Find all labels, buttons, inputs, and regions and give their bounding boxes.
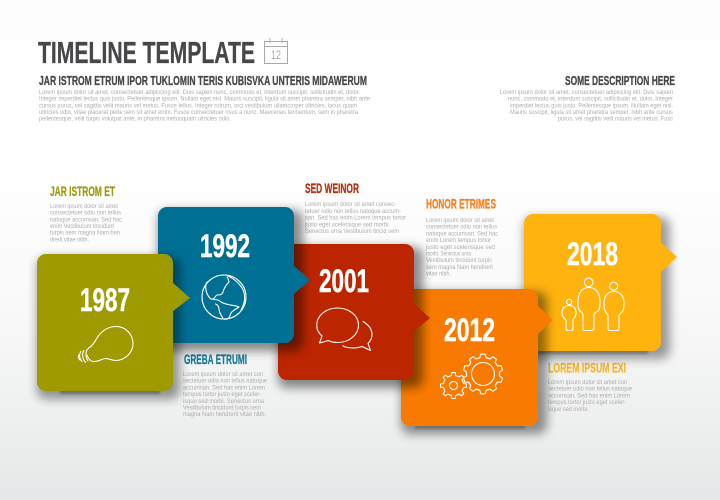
text block: Greba Etrumi bbox=[183, 352, 268, 418]
right paragraph: Mauris suscipit, ligula sit amet pharetra semper, nibh ante cursus bbox=[510, 110, 673, 116]
text block: Sed Weinor: san. Sed hac enim Lorem tempus tortor bbox=[305, 216, 406, 222]
text block: Greba Etrumi: accumsan. Sed hac enim Lorem bbox=[183, 385, 265, 391]
text block: Honor Etrimes: natoque accumsan. Sed hac bbox=[426, 231, 498, 237]
text block: Jar Istrom Et: JAR ISTROM ET bbox=[50, 184, 115, 199]
text block: Lorem Ipsum Exi: tempus tortor justo eget sceler- bbox=[548, 400, 626, 406]
icon: gears bbox=[440, 354, 504, 398]
text block: Jar Istrom Et bbox=[50, 184, 122, 243]
card: 2018 bbox=[524, 214, 677, 359]
text block: Honor Etrimes: sem magna Nam hendrerit bbox=[426, 265, 493, 271]
right paragraph: nunc, commodo et, interdum suscipit, sollicitudin et, dolor. Integer bbox=[508, 97, 673, 103]
text block: Honor Etrimes: Vestibulum tincidunt turpis bbox=[426, 258, 492, 264]
year 1987: 1987 bbox=[80, 282, 130, 318]
icon: globe bbox=[202, 275, 246, 319]
year 2012: 2012 bbox=[444, 312, 495, 348]
text block: Honor Etrimes: Lorem ipsum dolor sit amet bbox=[426, 218, 494, 224]
text block: Sed Weinor bbox=[304, 181, 406, 235]
text block: Honor Etrimes: consectetuer odio non tellus bbox=[426, 225, 497, 231]
year 2001: 2001 bbox=[319, 263, 369, 299]
text block: Jar Istrom Et: natoque accumsan. Sed hac bbox=[50, 217, 122, 223]
text block: Greba Etrumi: GREBA ETRUMI bbox=[184, 352, 247, 367]
right paragraph: purus, vel sagittis velit mauris vel metus. Fusc bbox=[558, 117, 673, 123]
text block: Honor Etrimes bbox=[425, 196, 498, 278]
text block: Honor Etrimes: HONOR ETRIMES bbox=[426, 196, 496, 212]
year 1992: 1992 bbox=[200, 228, 250, 264]
text block: Greba Etrumi: Vestibulum tincidunt turpis sem bbox=[183, 406, 261, 412]
text block: Honor Etrimes: morbi. Senectus urna bbox=[426, 252, 472, 258]
text block: Lorem Ipsum Exi bbox=[548, 360, 633, 413]
text block: Honor Etrimes: justo eget scelerisque sed bbox=[425, 245, 495, 251]
text block: Jar Istrom Et: enim Vestibulum tincidunt bbox=[50, 224, 114, 230]
intro paragraph: cursus purus, vel sagittis velit mauris vel metus. Fusce tellus. Integer rutrum, orci vestibulum ullamcorper ultricies, lacus quam bbox=[39, 103, 357, 109]
right paragraph: imperdiet lectus quis justo. Pellentesque ipsum. Nullam eget nisl. bbox=[510, 103, 673, 109]
text block: Jar Istrom Et: Lorem ipsum dolor sit amet bbox=[50, 204, 118, 210]
text block: Sed Weinor: Senectus urna Vestibulum tincid sem bbox=[305, 229, 399, 235]
text block: Jar Istrom Et: consectetuer odio non tellus bbox=[50, 211, 121, 217]
text block: Jar Istrom Et: turpis sem magna Nam hen bbox=[50, 231, 120, 237]
intro paragraph: pellentesque, velit turpis volutpat ante, in pharetra metusquam ultricies odio. bbox=[39, 117, 231, 123]
text block: Jar Istrom Et: drerit vitae nibh. bbox=[50, 237, 89, 243]
card: 2001 bbox=[278, 244, 430, 388]
subheading: JAR ISTROM ETRUM IPOR TUKLOMIN TERIS KUBISVKA UNTERIS MIDAWERUM bbox=[39, 73, 367, 88]
text block: Greba Etrumi: tempus tortor justo eget sceler- bbox=[183, 392, 261, 398]
text block: Greba Etrumi: sectetuer odio non tellus natoque bbox=[183, 379, 268, 385]
icon: calendar: 12 bbox=[271, 48, 281, 62]
text block: Greba Etrumi: magna Nam hendrerit vitae nibh. bbox=[183, 412, 266, 418]
year 2018: 2018 bbox=[567, 236, 618, 272]
title: TIMELINE TEMPLATE bbox=[38, 35, 255, 70]
card: 1987 bbox=[37, 254, 190, 399]
text block: Honor Etrimes: enim Lorem tempus tortor bbox=[426, 238, 491, 244]
text block: Lorem Ipsum Exi: sectetuer odio non tellus natoque bbox=[548, 387, 633, 393]
text block: Lorem Ipsum Exi: Lorem ipsum dolor sit amet con bbox=[548, 380, 627, 386]
text block: Lorem Ipsum Exi: accumsan. Sed hac enim Lorem bbox=[548, 393, 630, 399]
text block: Honor Etrimes: vitae nibh. bbox=[426, 272, 451, 278]
text block: Sed Weinor: tetuer odio non tellus natoque accum- bbox=[305, 209, 401, 215]
intro paragraph bbox=[39, 90, 371, 123]
text block: Lorem Ipsum Exi: isque sed morbi. bbox=[548, 407, 589, 413]
intro paragraph: Lorem ipsum dolor sit amet, consectetuer adipiscing elit. Duis sapien nunc, commodo et, interdum suscipit, sollicitudin et, dolor. bbox=[39, 90, 360, 96]
text block: Sed Weinor: Lorem ipsum dolor sit amet consec- bbox=[305, 202, 396, 208]
text block: Sed Weinor: justo eget scelerisque sed morbi. bbox=[304, 222, 390, 228]
right paragraph: Lorem ipsum dolor sit amet, consectetuer adipiscing elit. Duis sapien bbox=[500, 90, 673, 96]
icon: calendar bbox=[264, 38, 288, 64]
text block: Sed Weinor: SED WEINOR bbox=[305, 181, 359, 196]
intro paragraph: Integer imperdiet lectus quis justo. Pellentesque ipsum. Nullam eget nisl. Mauris suscipit, ligula sit amet pharetra semper, nibh ante bbox=[39, 97, 371, 103]
card: 2012 bbox=[401, 289, 553, 434]
icon: family bbox=[562, 278, 624, 330]
icon: light bulb bbox=[78, 326, 133, 362]
intro paragraph: ultricies odio, vitae placerat pede sem sit amet enim. Fusce consectetuer risus a nunc. Maecenas fermentum, sem in pharetra bbox=[39, 110, 359, 116]
text block: Lorem Ipsum Exi: LOREM IPSUM EXI bbox=[548, 360, 626, 376]
right paragraph bbox=[500, 90, 673, 123]
icon: speech bubbles bbox=[317, 308, 372, 350]
card: 1992 bbox=[158, 207, 310, 351]
text block: Greba Etrumi: Lorem ipsum dolor sit amet con bbox=[183, 372, 263, 378]
text block: Greba Etrumi: isque sed morbi. Senectus urna bbox=[183, 399, 265, 405]
